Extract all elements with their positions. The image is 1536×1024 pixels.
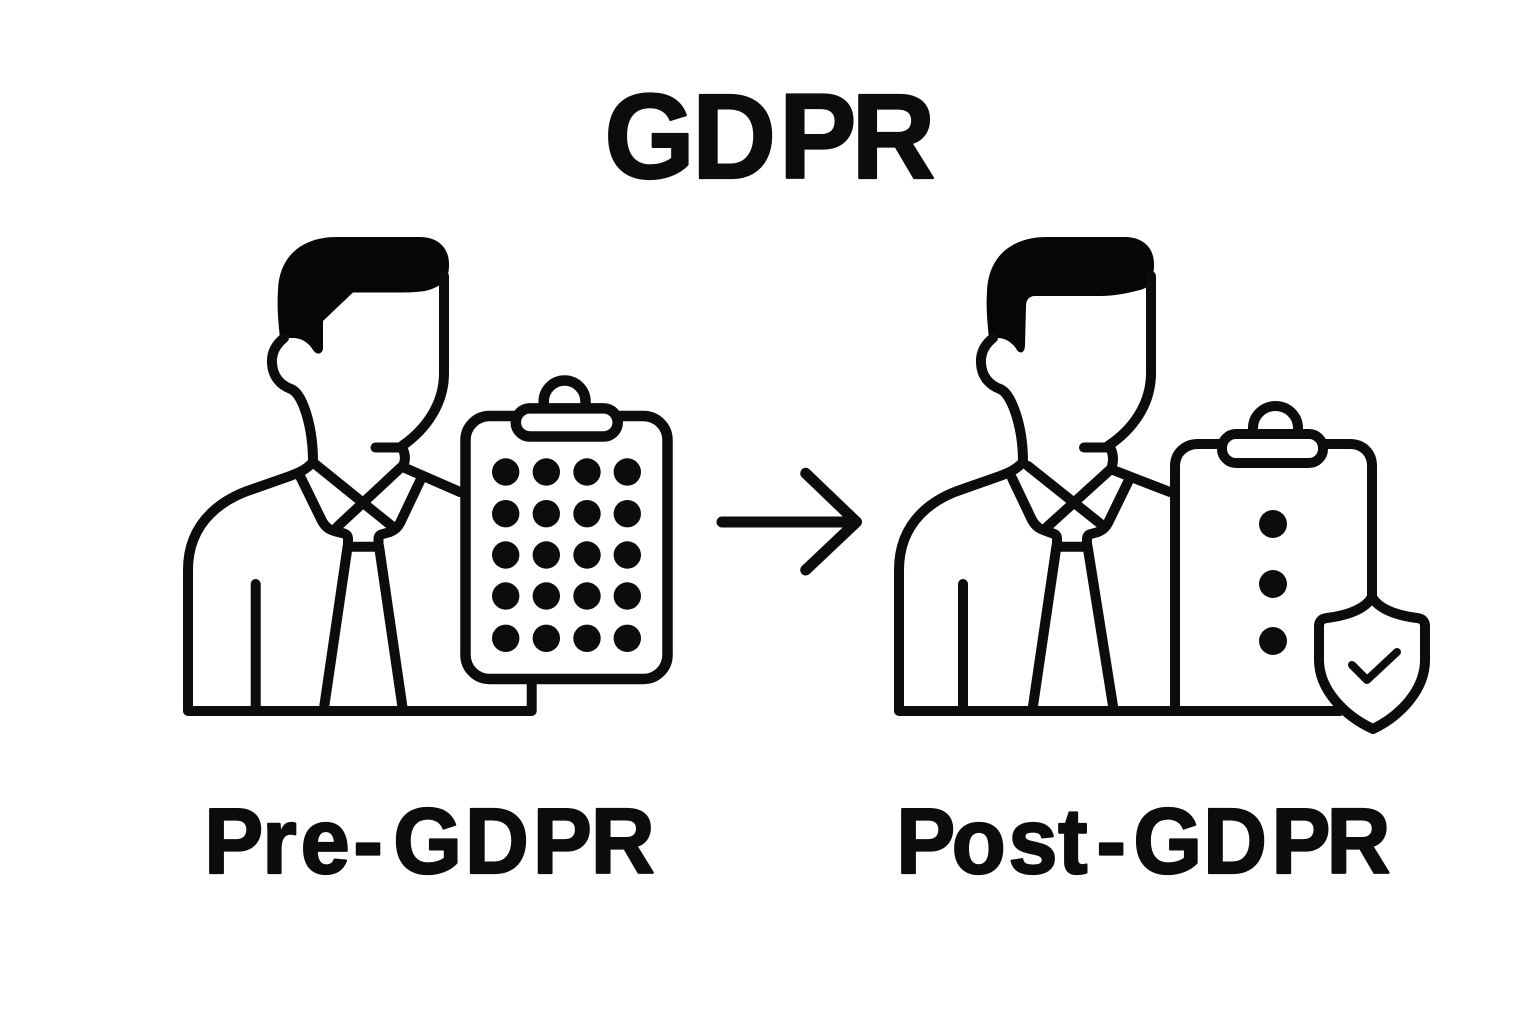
title: GDPR xyxy=(604,70,935,205)
label: Pre-GDPR: Pre-GDPR xyxy=(204,790,655,894)
icon: post-GDPR collar and tie xyxy=(1012,466,1128,706)
icon: post-GDPR hair xyxy=(987,237,1154,352)
icon: pre-GDPR head and shoulders xyxy=(188,276,532,711)
label: Post-GDPR: Post-GDPR xyxy=(896,790,1390,894)
figure: pre-GDPR person with clipboard xyxy=(188,237,668,711)
icon: post-GDPR data dots xyxy=(1259,510,1287,655)
icon: post-GDPR clipboard xyxy=(1175,406,1372,711)
figure: post-GDPR person with clipboard and shield xyxy=(899,237,1425,729)
icon: pre-GDPR data dots xyxy=(492,458,641,652)
icon: pre-GDPR clipboard xyxy=(466,380,668,679)
arrow xyxy=(722,473,856,570)
icon: post-GDPR head and shoulders xyxy=(899,276,1340,711)
icon: shield with check xyxy=(1319,597,1425,729)
icon: pre-GDPR hair xyxy=(278,237,449,354)
icon: pre-GDPR collar and tie xyxy=(300,464,420,706)
